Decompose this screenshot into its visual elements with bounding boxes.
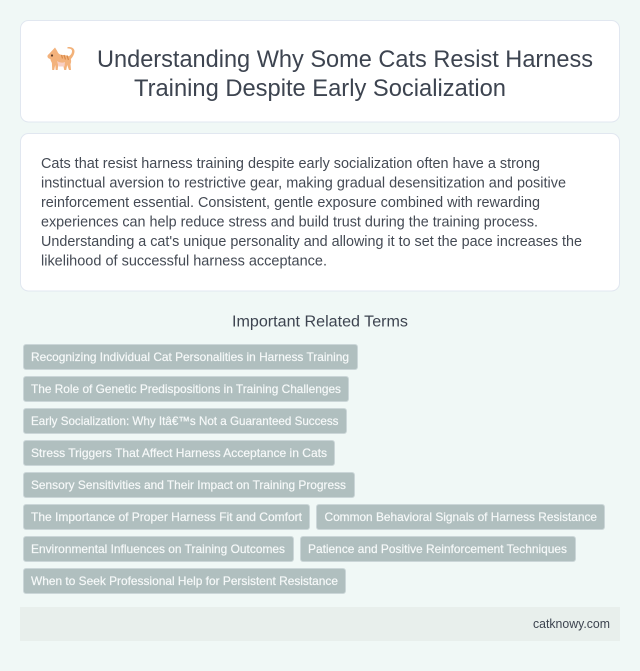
tag: Environmental Influences on Training Outcomes <box>31 542 285 556</box>
tag: The Role of Genetic Predispositions in Training Challenges <box>31 382 341 396</box>
tag <box>24 568 346 594</box>
tag: When to Seek Professional Help for Persistent Resistance <box>31 574 338 588</box>
tag: Early Socialization: Why Itâ€™s Not a Guaranteed Success <box>31 414 338 428</box>
title: Understanding Why Some Cats Resist Harness <box>97 46 593 73</box>
tag <box>24 376 348 402</box>
tag: Sensory Sensitivities and Their Impact on Training Progress <box>31 478 346 492</box>
heading: important related terms: Important Related Terms <box>232 314 408 330</box>
summary paragraph: Understanding a cat's unique personality and allowing it to set the pace increases the <box>41 234 582 250</box>
summary paragraph <box>41 156 582 270</box>
tag <box>24 504 310 530</box>
summary paragraph: likelihood of successful harness acceptance. <box>41 254 327 270</box>
icon: cat <box>47 47 74 70</box>
summary paragraph: reinforcement essential. Consistent, gentle exposure combined with rewarding <box>41 195 540 211</box>
title <box>97 46 593 102</box>
title: Training Despite Early Socialization <box>134 75 506 102</box>
tag: Stress Triggers That Affect Harness Acceptance in Cats <box>31 446 327 460</box>
tag list <box>24 344 604 594</box>
tag: Recognizing Individual Cat Personalities in Harness Training <box>31 350 349 364</box>
tag: Common Behavioral Signals of Harness Resistance <box>324 510 597 524</box>
tag <box>24 472 354 498</box>
panel: summary text card <box>20 134 620 291</box>
tag <box>24 344 358 370</box>
panel: title card <box>20 20 620 122</box>
tag: Patience and Positive Reinforcement Techniques <box>308 542 567 556</box>
tag <box>24 408 346 434</box>
summary paragraph: experiences can help reduce stress and build trust during the training process. <box>41 214 538 230</box>
footer source: catknowy.com <box>533 617 610 631</box>
tag <box>24 536 294 562</box>
tag <box>24 440 334 466</box>
tag: The Importance of Proper Harness Fit and Comfort <box>31 510 303 524</box>
summary paragraph: Cats that resist harness training despite early socialization often have a strong <box>41 156 540 172</box>
tag <box>316 504 604 530</box>
summary paragraph: instinctual aversion to restrictive gear, making gradual desensitization and positive <box>41 176 566 192</box>
footer bar <box>20 607 620 641</box>
tag <box>300 536 576 562</box>
